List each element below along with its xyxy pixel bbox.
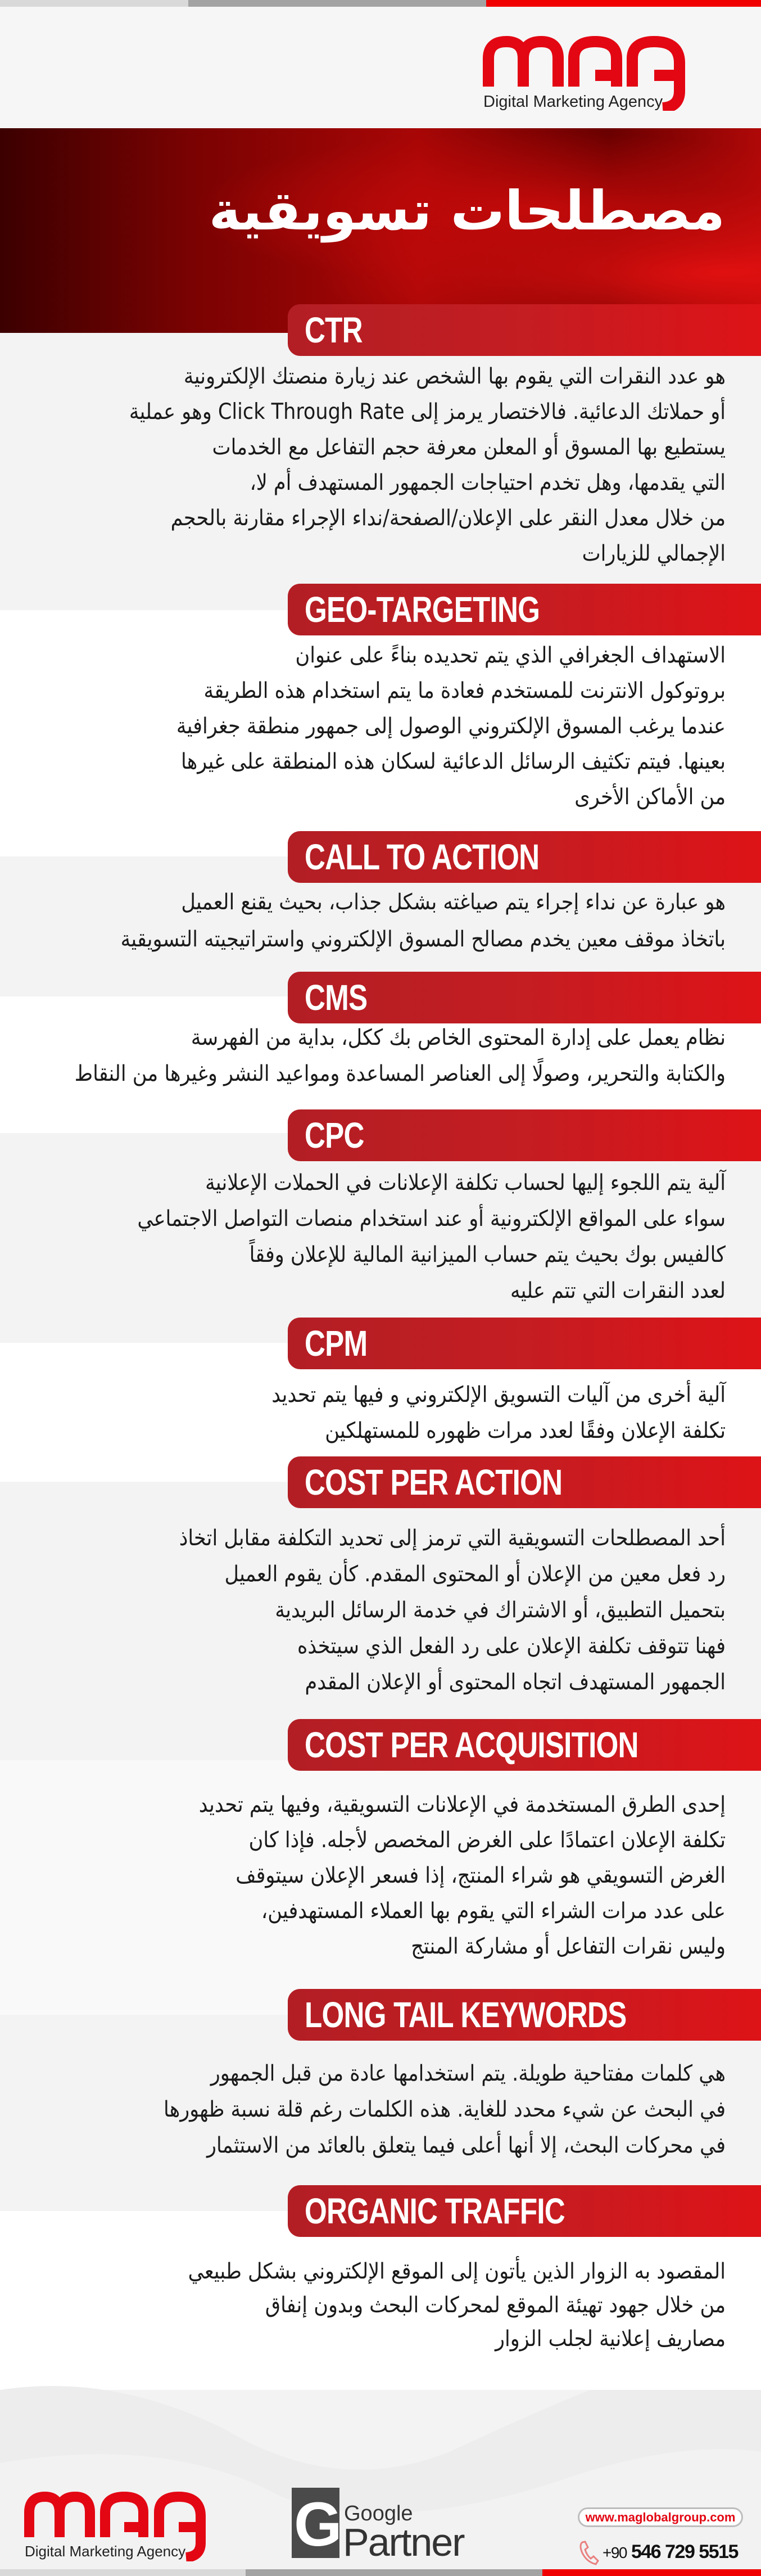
header background — [0, 7, 761, 128]
phone: +90 546 729 5515 — [603, 2541, 738, 2563]
text: COST PER ACQUISITION: على عدد مرات الشراء التي يقوم بها العملاء المستهدفين، — [261, 1898, 726, 1924]
text: COST PER ACQUISITION: الغرض التسويقي هو شراء المنتج، إذا فسعر الإعلان سيتوقف — [235, 1863, 726, 1888]
google partner badge: Google — [344, 2502, 413, 2525]
section: CTR — [129, 304, 761, 566]
footer — [1, 2386, 743, 2565]
top stripe — [0, 0, 761, 7]
text: CALL TO ACTION: هو عبارة عن نداء إجراء يتم صياغته بشكل جذاب، بحيث يقنع العميل — [181, 890, 726, 915]
text: ORGANIC TRAFFIC: المقصود به الزوار الذين يأتون إلى الموقع الإلكتروني بشكل طبيعي — [188, 2259, 726, 2284]
text: CALL TO ACTION — [121, 890, 726, 952]
heading: ORGANIC TRAFFIC: ORGANIC TRAFFIC — [305, 2191, 565, 2231]
text: ORGANIC TRAFFIC — [188, 2256, 726, 2352]
bottom stripe — [0, 2569, 761, 2576]
heading: CPM: CPM — [305, 1323, 367, 1364]
white bands — [0, 610, 761, 856]
text: LONG TAIL KEYWORDS: في محركات البحث، إلا أنها أعلى فيما يتعلق بالعائد من الاستثمار — [207, 2133, 726, 2158]
heading: CPC — [288, 1109, 761, 1161]
text: ORGANIC TRAFFIC: من خلال جهود تهيئة الموقع لمحركات البحث وبدون إنفاق — [265, 2293, 726, 2318]
heading: LONG TAIL KEYWORDS — [288, 1989, 761, 2041]
footer logo — [24, 2492, 206, 2561]
text: GEO-TARGETING: بروتوكول الانترنت للمستخدم فعادة ما يتم استخدام هذه الطريقة — [204, 678, 726, 703]
text: CTR: هو عدد النقرات التي يقوم بها الشخص عند زيارة منصتك الإلكترونية — [184, 364, 726, 389]
text: COST PER ACQUISITION: وليس نقرات التفاعل أو مشاركة المنتج — [411, 1934, 726, 1959]
text: COST PER ACTION: الجمهور المستهدف اتجاه المحتوى أو الإعلان المقدم — [305, 1670, 726, 1695]
title: مصطلحات تسويقية — [209, 179, 725, 242]
section: GEO-TARGETING — [176, 584, 761, 810]
text: CALL TO ACTION: باتخاذ موقف معين يخدم مصالح المسوق الإلكتروني واستراتيجيته التسويقية — [121, 927, 726, 952]
text: CMS — [75, 1025, 726, 1086]
heading: CMS — [288, 972, 761, 1023]
google partner badge: Partner — [343, 2520, 464, 2564]
text: LONG TAIL KEYWORDS — [164, 2061, 726, 2158]
text: CPC: كالفيس بوك بحيث يتم حساب الميزانية المالية للإعلان وفقاً — [250, 1242, 726, 1267]
heading: CTR: CTR — [305, 310, 363, 350]
heading: COST PER ACTION: COST PER ACTION — [305, 1462, 562, 1503]
text: CPM: آلية أخرى من آليات التسويق الإلكتروني و فيها يتم تحديد — [271, 1382, 726, 1407]
text: CTR: من خلال معدل النقر على الإعلان/الصفحة/نداء الإجراء مقارنة بالحجم — [171, 506, 726, 531]
text: GEO-TARGETING: من الأماكن الأخرى — [574, 784, 726, 810]
section: CMS — [75, 972, 761, 1086]
section: CPC — [137, 1109, 761, 1303]
section: COST PER ACQUISITION — [199, 1719, 761, 1959]
google partner badge — [292, 2488, 464, 2564]
text: CTR: يستطيع بها المسوق أو المعلن معرفة حجم التفاعل مع الخدمات — [212, 435, 726, 460]
text: CPC — [137, 1170, 726, 1303]
heading: CALL TO ACTION — [288, 831, 761, 883]
text: CPC: سواء على المواقع الإلكترونية أو عند استخدام منصات التواصل الاجتماعي — [137, 1206, 726, 1231]
heading: LONG TAIL KEYWORDS: LONG TAIL KEYWORDS — [305, 1995, 626, 2035]
text: CPC: آلية يتم اللجوء إليها لحساب تكلفة الإعلانات في الحملات الإعلانية — [205, 1170, 726, 1195]
text: GEO-TARGETING: عندما يرغب المسوق الإلكتروني الوصول إلى جمهور منطقة جغرافية — [176, 714, 726, 739]
text: GEO-TARGETING — [176, 643, 726, 810]
text: ORGANIC TRAFFIC: مصاريف إعلانية لجلب الزوار — [495, 2326, 726, 2352]
heading: CALL TO ACTION: CALL TO ACTION — [305, 837, 539, 877]
text: COST PER ACQUISITION: إحدى الطرق المستخدمة في الإعلانات التسويقية، وفيها يتم تحديد — [199, 1792, 726, 1817]
website pill: www.maglobalgroup.com — [586, 2510, 735, 2524]
heading: COST PER ACQUISITION — [288, 1719, 761, 1771]
heading: COST PER ACQUISITION: COST PER ACQUISITION — [305, 1725, 638, 1765]
heading: COST PER ACTION — [288, 1456, 761, 1508]
text: GEO-TARGETING: بعينها. فيتم تكثيف الرسائل الدعائية لسكان هذه المنطقة على غيرها — [181, 749, 726, 774]
text: COST PER ACQUISITION: تكلفة الإعلان اعتمادًا على الغرض المخصص لأجله. فإذا كان — [249, 1828, 726, 1853]
text: GEO-TARGETING: الاستهداف الجغرافي الذي يتم تحديده بناءً على عنوان — [296, 643, 726, 668]
text: CTR: التي يقدمها، وهل تخدم احتياجات الجمهور المستهدف أم لا، — [250, 470, 726, 495]
footer background wave — [1, 2386, 103, 2390]
heading: CPC: CPC — [305, 1115, 364, 1156]
text: COST PER ACTION: بتحميل التطبيق، أو الاشتراك في خدمة الرسائل البريدية — [275, 1598, 726, 1623]
text: CMS: والكتابة والتحرير، وصولًا إلى العناصر المساعدة ومواعيد النشر وغيرها من النقاط — [75, 1061, 726, 1086]
banner: red photo — [0, 128, 761, 333]
section: CALL TO ACTION — [121, 831, 761, 952]
website pill — [578, 2507, 743, 2527]
text: CPM: تكلفة الإعلان وفقًا لعدد مرات ظهوره للمستهلكين — [325, 1418, 726, 1443]
text: COST PER ACTION: أحد المصطلحات التسويقية التي ترمز إلى تحديد التكلفة مقابل اتخاذ — [179, 1526, 726, 1551]
text: LONG TAIL KEYWORDS: هي كلمات مفتاحية طويلة. يتم استخدامها عادة من قبل الجمهور — [211, 2061, 726, 2086]
text: CTR: أو حملاتك الدعائية. فالاختصار يرمز إلى Click Through Rate وهو عملية — [129, 399, 726, 425]
icon: phone — [580, 2541, 599, 2565]
heading: GEO-TARGETING — [288, 584, 761, 635]
heading: CPM — [288, 1318, 761, 1369]
header logo — [483, 36, 685, 111]
text: CPM — [271, 1380, 726, 1443]
section: ORGANIC TRAFFIC — [188, 2185, 761, 2352]
text: CPC: لعدد النقرات التي تتم عليه — [510, 1278, 726, 1303]
heading: CTR — [288, 304, 761, 356]
heading: CMS: CMS — [305, 977, 367, 1018]
heading: ORGANIC TRAFFIC — [288, 2185, 761, 2237]
section: COST PER ACTION — [179, 1456, 761, 1695]
text: CTR — [129, 364, 726, 566]
text: CTR: الإجمالي للزيارات — [582, 541, 726, 566]
text: COST PER ACTION: رد فعل معين من الإعلان أو المحتوى المقدم. كأن يقوم العميل — [225, 1562, 726, 1587]
heading: GEO-TARGETING: GEO-TARGETING — [305, 589, 540, 630]
text: LONG TAIL KEYWORDS: في البحث عن شيء محدد للغاية. هذه الكلمات رغم قلة نسبة ظهورها — [164, 2097, 726, 2122]
section: LONG TAIL KEYWORDS — [164, 1989, 761, 2158]
header logo: Digital Marketing Agency — [483, 93, 663, 111]
text: COST PER ACTION — [179, 1523, 726, 1695]
icon: G: G — [294, 2490, 342, 2559]
text: COST PER ACQUISITION — [199, 1792, 726, 1959]
footer logo: Digital Marketing Agency — [25, 2543, 185, 2560]
text: COST PER ACTION: فهنا تتوقف تكلفة الإعلان على رد الفعل الذي سيتخذه — [297, 1634, 726, 1659]
text: CMS: نظام يعمل على إدارة المحتوى الخاص بك ككل، بداية من الفهرسة — [191, 1025, 726, 1050]
section: CPM — [271, 1318, 761, 1443]
